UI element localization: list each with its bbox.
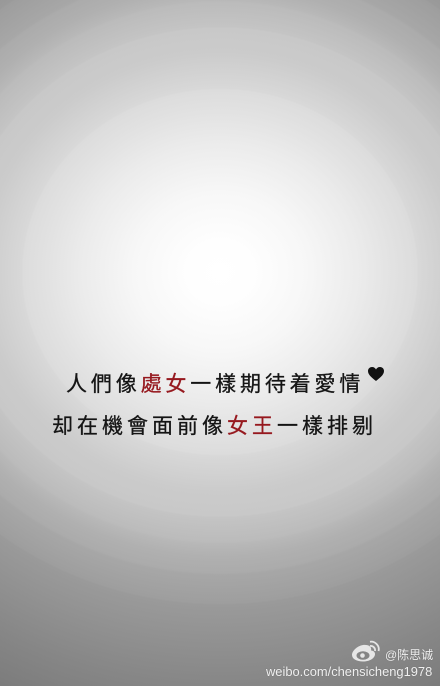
watermark: author name: @陈思诚 — [385, 648, 433, 662]
text line 1: 人們像處女一樣期待着愛情 — [66, 373, 364, 396]
icon: weibo logo — [352, 640, 380, 662]
watermark: url: weibo.com/chensicheng1978 — [266, 664, 432, 679]
text line 2: 却在機會面前像女王一樣排剔 — [52, 415, 377, 438]
icon: heart — [368, 367, 384, 381]
